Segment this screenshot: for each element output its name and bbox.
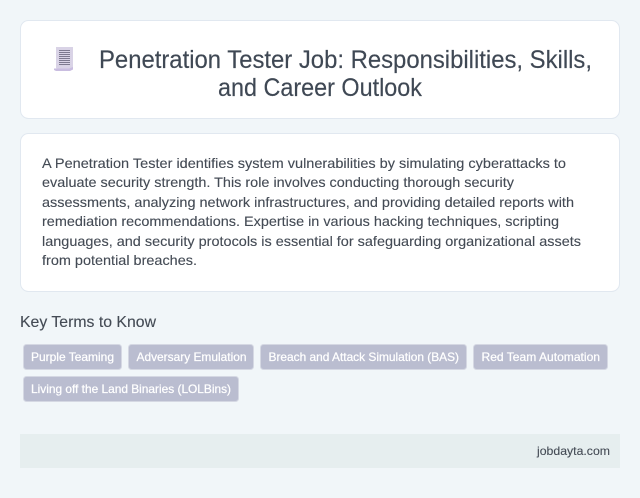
tag: Breach and Attack Simulation: Breach and Attack Simulation (BAS) <box>268 350 459 364</box>
description text: evaluate security strength. This role involves conducting thorough security <box>42 174 514 190</box>
title: and Career Outlook <box>218 74 422 102</box>
description text <box>42 155 581 268</box>
tag: Purple Teaming <box>24 344 122 370</box>
footer source text: jobdayta.com <box>536 444 610 458</box>
tag: Adversary Emulation <box>128 344 254 370</box>
tag: Red Team Automation <box>474 344 608 370</box>
tag: LOLBins <box>24 376 238 402</box>
tag: LOLBins: Living off the Land Binaries (LOLBins) <box>31 382 231 396</box>
title: Penetration Tester Job: Responsibilities, Skills, <box>99 46 592 74</box>
description text: assessments, analyzing network infrastructures, and providing detailed reports with <box>42 194 574 210</box>
description text: from potential breaches. <box>42 252 197 268</box>
tag: Adversary Emulation: Adversary Emulation <box>136 350 246 364</box>
heading: key terms: Key Terms to Know <box>20 314 156 331</box>
footer bar <box>20 434 620 468</box>
panel: title card <box>20 20 620 118</box>
tag: Purple Teaming: Purple Teaming <box>31 350 114 364</box>
tag list <box>24 344 608 402</box>
icon: document scroll <box>54 47 73 71</box>
tag: Red Team Automation: Red Team Automation <box>482 350 600 364</box>
tag: Breach and Attack Simulation <box>260 344 466 370</box>
description text: A Penetration Tester identifies system vulnerabilities by simulating cyberattacks to <box>42 155 566 171</box>
description text: languages, and security protocols is essential for safeguarding organizational assets <box>42 233 581 249</box>
title <box>99 46 592 102</box>
description text: remediation recommendations. Expertise in various hacking techniques, scripting <box>42 213 559 229</box>
panel: description card <box>20 134 620 292</box>
